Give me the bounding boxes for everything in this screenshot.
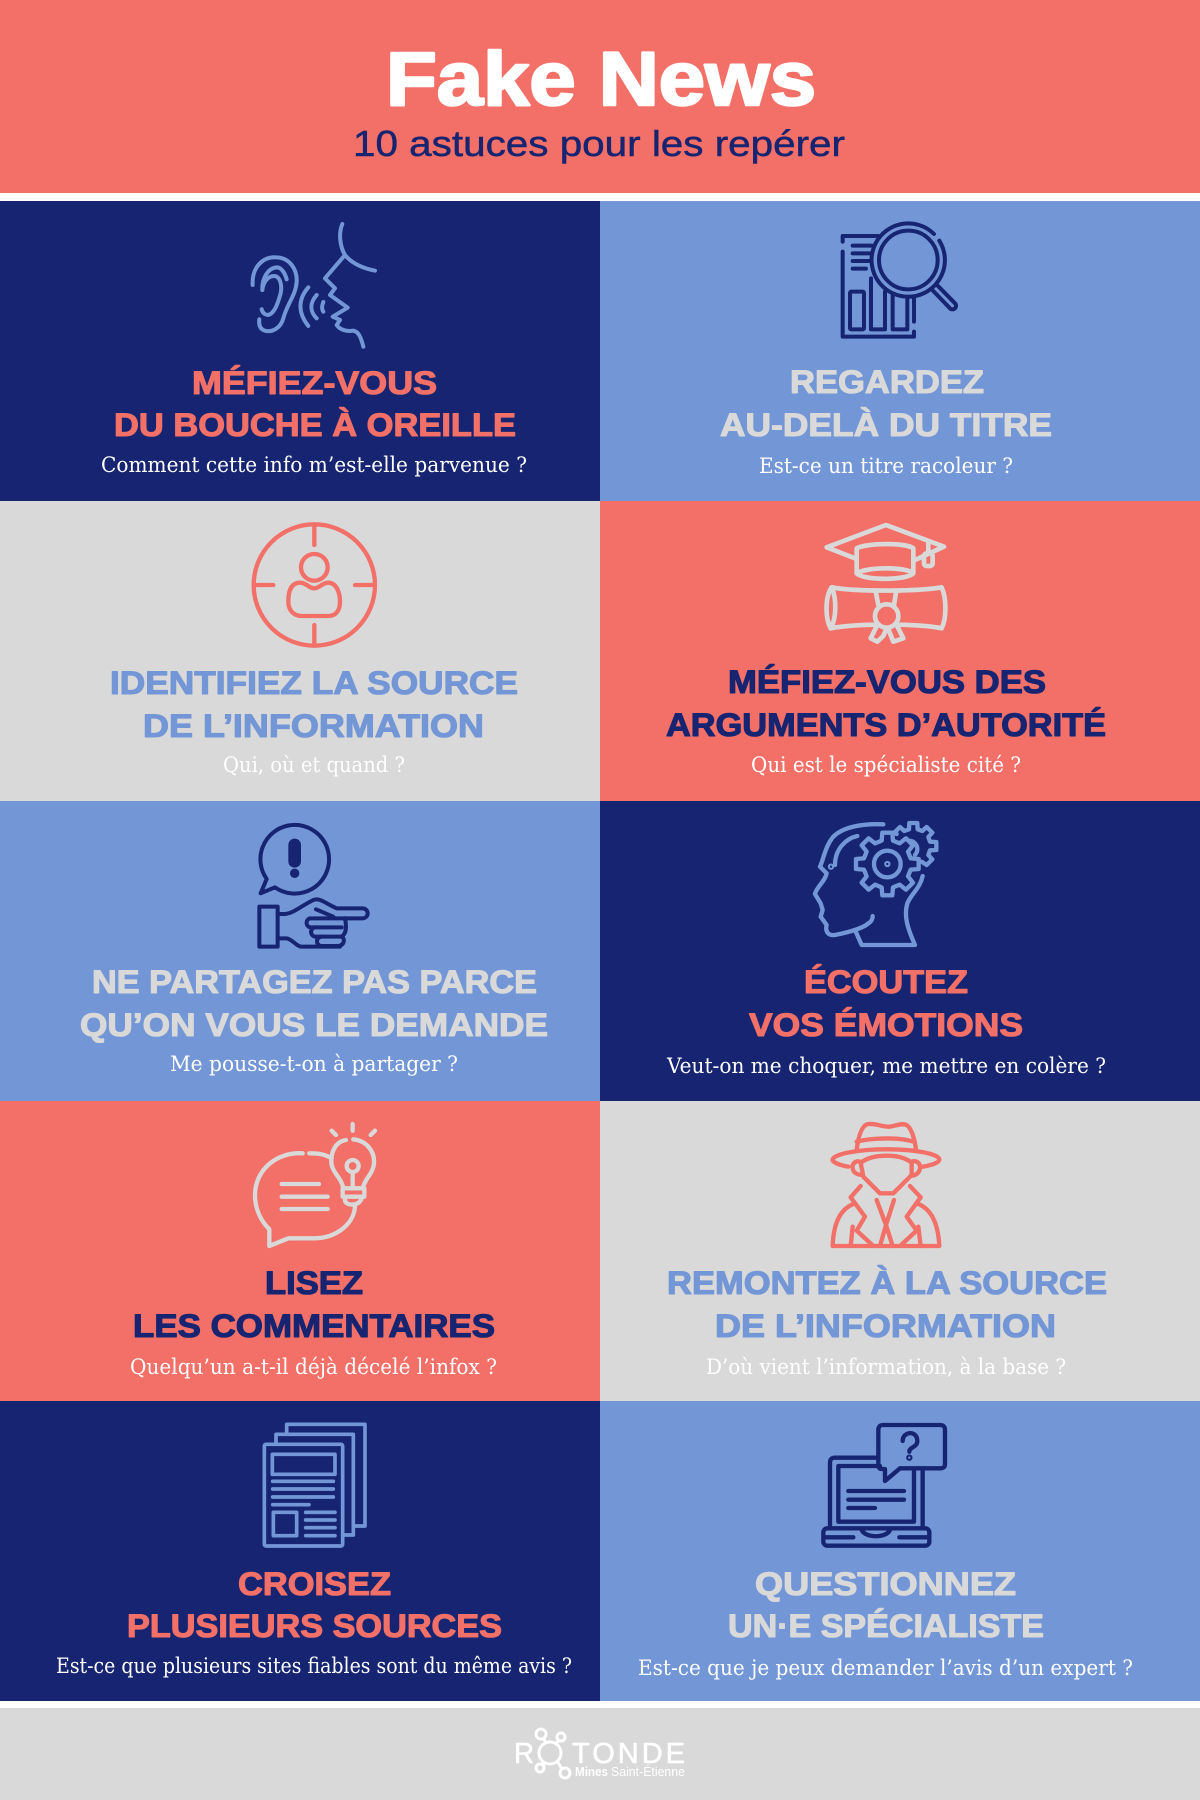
heading [720, 364, 1052, 443]
heading: ÉCOUTEZ [804, 964, 968, 1000]
panel: identifier la source [0, 501, 600, 801]
heading: UN·E SPÉCIALISTE [728, 1608, 1044, 1644]
icon: ear and face [253, 224, 375, 347]
icon: speech bubble and pointing hand [259, 825, 368, 947]
subtext: Veut-on me choquer, me mettre en colère ? [666, 1054, 1106, 1078]
heading [110, 665, 518, 744]
subtext: Qui, où et quand ? [223, 753, 405, 777]
subtext: Est-ce un titre racoleur ? [759, 454, 1013, 478]
heading: DU BOUCHE À OREILLE [114, 407, 516, 443]
subtext: D’où vient l’information, à la base ? [706, 1355, 1066, 1379]
panel: lisez les commentaires [0, 1101, 600, 1401]
heading [114, 365, 516, 443]
heading: PLUSIEURS SOURCES [127, 1608, 502, 1644]
icon: comment bubble with light bulb [255, 1124, 375, 1246]
heading [666, 664, 1106, 743]
logo: Rotonde [514, 1729, 685, 1779]
heading: QU’ON VOUS LE DEMANDE [80, 1007, 548, 1043]
logo: Rotonde: TONDE [572, 1738, 685, 1770]
icon: target on person [254, 524, 375, 646]
title: Fake News [386, 37, 816, 122]
subtext: Est-ce que plusieurs sites fiables sont du même avis ? [56, 1654, 572, 1678]
panel: arguments d'autorité [600, 501, 1200, 801]
logo: Rotonde: Saint-Étienne [611, 1764, 685, 1779]
heading: NE PARTAGEZ PAS PARCE [92, 964, 537, 1000]
panel: questionnez un spécialiste [600, 1401, 1200, 1701]
subtitle: 10 astuces pour les repérer [353, 123, 845, 164]
icon: stack of newspapers [264, 1424, 365, 1546]
heading: CROISEZ [238, 1566, 391, 1602]
heading: QUESTIONNEZ [755, 1566, 1016, 1602]
subtext: Me pousse-t-on à partager ? [170, 1052, 458, 1076]
heading: REMONTEZ À LA SOURCE [667, 1265, 1107, 1301]
header panel [0, 0, 1200, 193]
logo: Rotonde: R [514, 1738, 534, 1770]
subtext: Quelqu’un a-t-il déjà décelé l’infox ? [130, 1355, 497, 1379]
icon: magnifier over document [843, 223, 956, 337]
panel: ne partagez pas [0, 801, 600, 1101]
heading [749, 964, 1023, 1043]
heading: REGARDEZ [790, 364, 984, 400]
heading [667, 1265, 1107, 1344]
subtext: Est-ce que je peux demander l’avis d’un expert ? [638, 1656, 1133, 1680]
heading: LES COMMENTAIRES [133, 1308, 495, 1344]
icon: head with gears [815, 823, 936, 945]
panel: remontez à la source [600, 1101, 1200, 1401]
icon: laptop with question bubble [823, 1425, 945, 1546]
heading: MÉFIEZ-VOUS [192, 365, 437, 401]
heading: DE L’INFORMATION [143, 708, 484, 744]
heading [133, 1265, 495, 1344]
heading: VOS ÉMOTIONS [749, 1007, 1023, 1043]
icon: graduation cap and diploma [827, 525, 945, 642]
icon: detective [833, 1124, 939, 1246]
heading [80, 964, 548, 1043]
heading: LISEZ [265, 1265, 363, 1301]
heading: DE L’INFORMATION [715, 1308, 1056, 1344]
heading [127, 1566, 502, 1644]
heading: ARGUMENTS D’AUTORITÉ [666, 707, 1106, 743]
footer panel [0, 1708, 1200, 1800]
subtext: Qui est le spécialiste cité ? [751, 753, 1021, 777]
heading: MÉFIEZ-VOUS DES [728, 664, 1046, 700]
logo: Rotonde: Mines [575, 1764, 608, 1779]
panel: bouche à oreille [0, 201, 600, 501]
panel: au-delà du titre [600, 201, 1200, 501]
heading: AU-DELÀ DU TITRE [720, 407, 1052, 443]
panel: écoutez vos émotions [600, 801, 1200, 1101]
panel: croisez plusieurs sources [0, 1401, 600, 1701]
subtext: Comment cette info m’est-elle parvenue ? [101, 453, 527, 477]
heading [728, 1566, 1044, 1644]
heading: IDENTIFIEZ LA SOURCE [110, 665, 518, 701]
